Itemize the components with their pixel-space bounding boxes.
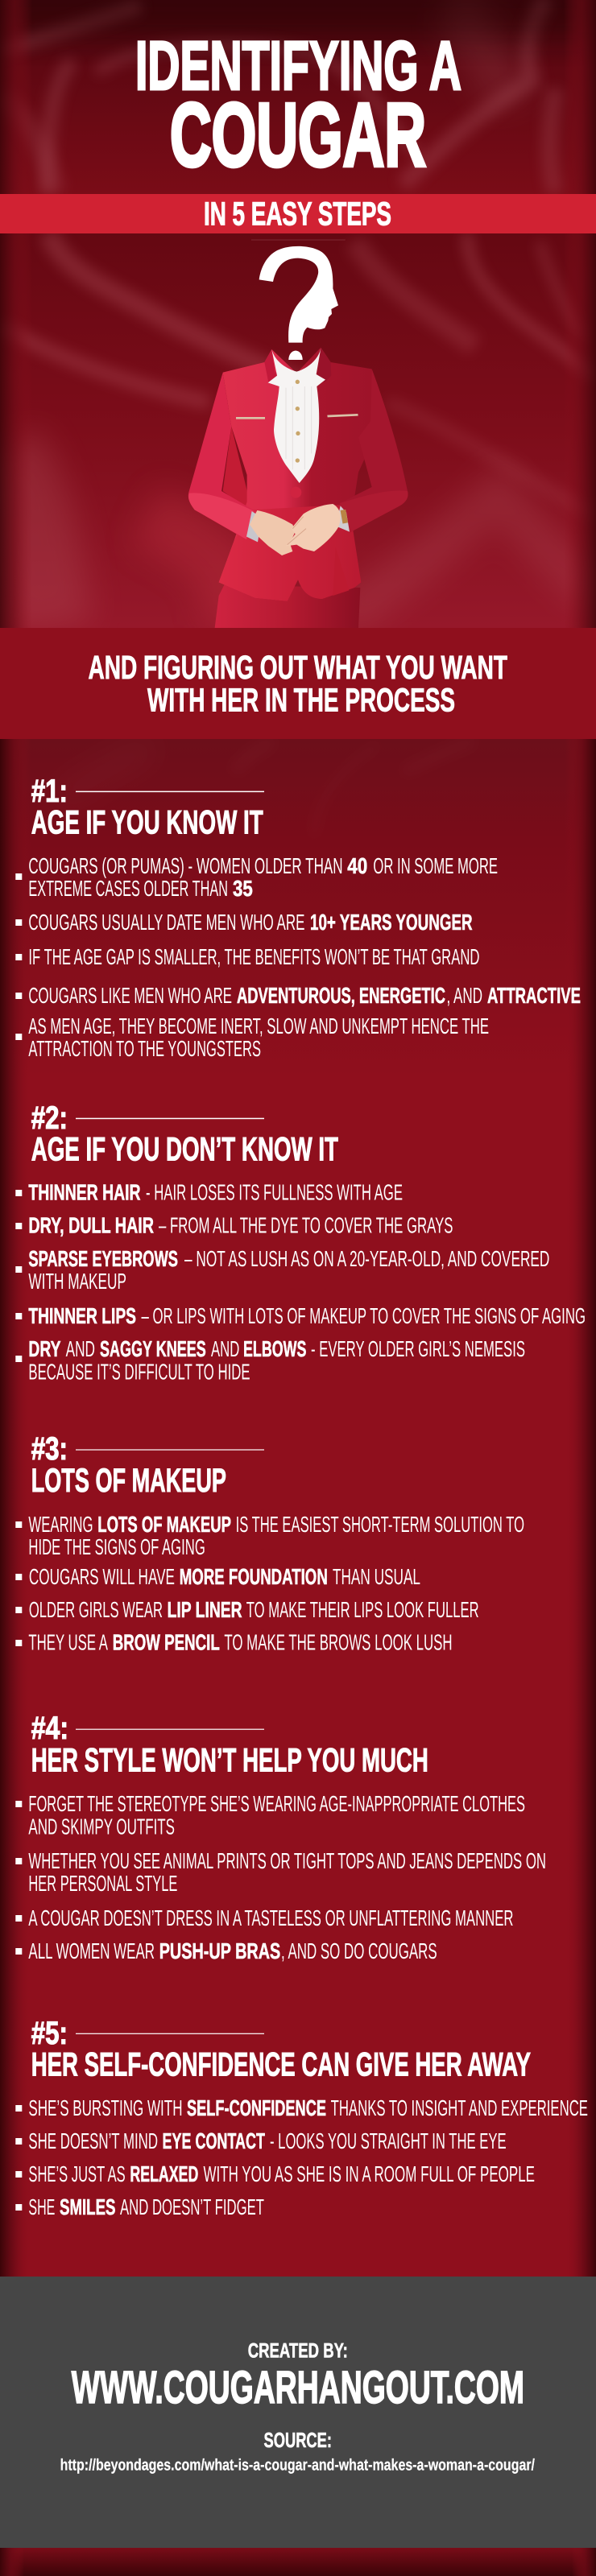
bullet list 4: , AND SO DO COUGARS (281, 1938, 437, 1963)
bullet list 3: LOTS OF MAKEUP (97, 1512, 231, 1537)
bullet list 1: ADVENTUROUS, ENERGETIC (237, 983, 445, 1008)
bullet list 5 (15, 2095, 588, 2219)
panel: subtitle band: WITH HER IN THE PROCESS (147, 681, 455, 718)
section 1: age if you know it (15, 774, 581, 1061)
bullet list 2: SAGGY KNEES (100, 1336, 206, 1361)
banner: in 5 easy steps (0, 194, 596, 233)
bullet list 1: OR IN SOME MORE (373, 853, 498, 878)
bullet list 5: SHE’S JUST AS (28, 2161, 126, 2186)
step number 1: #1: (31, 774, 68, 809)
section 5: her self-confidence can give her away (15, 2016, 588, 2219)
bullet list 1: ATTRACTION TO THE YOUNGSTERS (28, 1036, 261, 1061)
bullet list 5: SELF-CONFIDENCE (187, 2095, 326, 2120)
bullet list 3: WEARING (28, 1512, 93, 1537)
step number 3: #3: (31, 1431, 68, 1467)
section 2: age if you don't know it (15, 1100, 586, 1384)
section 3: lots of makeup (15, 1431, 524, 1655)
step number 5: #5: (31, 2016, 68, 2051)
bullet list 3: TO MAKE THE BROWS LOOK LUSH (224, 1630, 453, 1655)
bullet list 2: DRY (28, 1336, 61, 1361)
panel: steps background (0, 739, 596, 2277)
suit skirt (215, 585, 360, 628)
bullet list 3: COUGARS WILL HAVE (29, 1564, 175, 1589)
bullet list 4 (15, 1791, 546, 1963)
bullet list 4: ALL WOMEN WEAR (28, 1938, 155, 1963)
bullet list 3: BROW PENCIL (113, 1630, 220, 1655)
suit jacket (188, 348, 408, 601)
title: Identifying a Cougar: COUGAR (170, 85, 426, 185)
bullet list 2: WITH MAKEUP (28, 1269, 126, 1294)
bullet list 5: SHE’S BURSTING WITH (28, 2095, 183, 2120)
bullet list 1: 40 (347, 853, 367, 878)
bullet list 3: OLDER GIRLS WEAR (29, 1597, 163, 1622)
bullet list 3: LIP LINER (168, 1597, 242, 1622)
bullet list 1: , AND (446, 983, 482, 1008)
bullet list 2: SPARSE EYEBROWS (28, 1246, 178, 1271)
created by label: CREATED BY: (248, 2339, 348, 2362)
bullet list 1: COUGARS LIKE MEN WHO ARE (28, 983, 232, 1008)
bullet list 1: EXTREME CASES OLDER THAN (28, 876, 228, 901)
section 4: her style won't help you much (15, 1711, 546, 1963)
heading 3: LOTS OF MAKEUP (31, 1461, 226, 1499)
bullet list 4: PUSH-UP BRAS (159, 1938, 280, 1963)
banner: in 5 easy steps: IN 5 EASY STEPS (204, 195, 391, 232)
step number 2: #2: (31, 1100, 68, 1136)
bullet list 1: COUGARS (OR PUMAS) - WOMEN OLDER THAN (28, 853, 343, 878)
bullet list 1 (15, 853, 581, 1061)
bullet list 3: MORE FOUNDATION (180, 1564, 328, 1589)
bullet list 5: SHE (28, 2194, 55, 2219)
panel: credits footer (0, 2277, 596, 2548)
title: Identifying a Cougar (135, 27, 461, 185)
panel: subtitle band (0, 628, 596, 740)
bullet list 4: HER PERSONAL STYLE (28, 1871, 177, 1896)
pocket bars (236, 414, 358, 419)
bullet list 3: THEY USE A (28, 1630, 108, 1655)
bullet list 5: SHE DOESN’T MIND (28, 2128, 158, 2153)
shirt (268, 349, 325, 483)
bullet list 2 (15, 1180, 586, 1384)
bullet list 2: THINNER HAIR (28, 1180, 141, 1205)
icon: question mark with face profile (259, 246, 338, 360)
bullet list 3: HIDE THE SIGNS OF AGING (28, 1534, 205, 1559)
heading 1: AGE IF YOU KNOW IT (31, 803, 263, 840)
bullet list 2: BECAUSE IT’S DIFFICULT TO HIDE (28, 1359, 250, 1384)
panel: silk header background (0, 0, 596, 628)
bullet list 2: DRY, DULL HAIR (28, 1213, 154, 1238)
step number 4: #4: (31, 1711, 68, 1746)
bullet list 4: AND SKIMPY OUTFITS (28, 1814, 175, 1839)
bullet list 1: 10+ YEARS YOUNGER (310, 910, 473, 935)
bullet list 1: COUGARS USUALLY DATE MEN WHO ARE (28, 910, 305, 935)
bullet list 2: AND (66, 1336, 95, 1361)
bullet list 2: THINNER LIPS (28, 1303, 136, 1328)
bullet list 3 (15, 1512, 524, 1655)
panel: bottom strip (0, 2548, 596, 2576)
bullet list 5: RELAXED (130, 2161, 198, 2186)
bullet list 5: EYE CONTACT (163, 2128, 265, 2153)
hands and cuffs (246, 504, 350, 555)
source label: SOURCE: (264, 2428, 332, 2452)
bullet list 2: - HAIR LOSES ITS FULLNESS WITH AGE (146, 1180, 403, 1205)
heading 2: AGE IF YOU DON’T KNOW IT (31, 1130, 338, 1167)
bullet list 1: 35 (233, 876, 253, 901)
bullet list 2: ELBOWS (243, 1336, 306, 1361)
bullet list 3: THAN USUAL (333, 1564, 420, 1589)
bullet list 5: AND DOESN’T FIDGET (120, 2194, 264, 2219)
jacket button (290, 487, 301, 498)
bullet list 5: SMILES (60, 2194, 116, 2219)
bullet list 2: AND (211, 1336, 239, 1361)
illustration: headless woman in red suit with question mark head (188, 240, 408, 628)
